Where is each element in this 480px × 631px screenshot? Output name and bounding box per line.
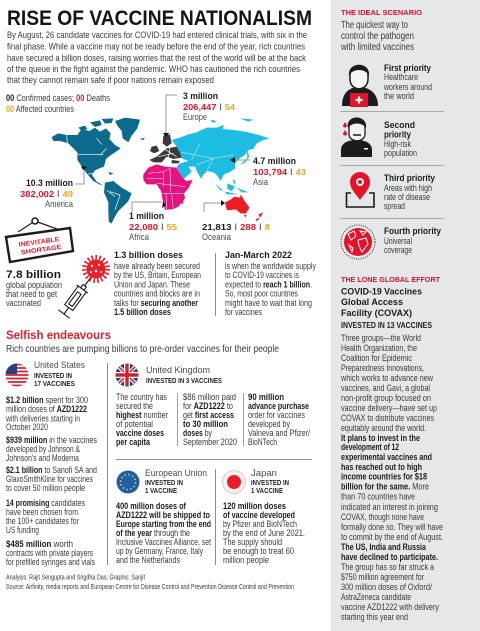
label: America: [20, 178, 73, 209]
text block: COVAX description: has reached out to high: [341, 462, 422, 472]
panel: the ideal scenario: The quickest way to: [341, 20, 408, 31]
panel: United States: [5, 360, 97, 567]
panel: European Union: up by Germany, France, Italy: [116, 546, 203, 556]
text: fourth priority: Universal: [384, 236, 412, 246]
text block: COVAX description: It plans to invest in the: [341, 433, 420, 443]
label: America: America: [45, 199, 73, 209]
credits: [6, 572, 294, 591]
icon: globe universal coverage: [341, 225, 375, 259]
text block: COVAX description: development of 12: [341, 442, 399, 452]
panel: United States: Johnson's and Moderna: [6, 453, 79, 463]
text block: COVAX description: [340, 333, 443, 622]
panel: United Kingdom: BioNTech: [248, 437, 277, 447]
icon: Japan flag: [222, 470, 246, 494]
panel: Japan: Japan: [251, 468, 277, 478]
panel: United States: October 2020: [6, 422, 48, 432]
panel: United Kingdom: September 2020: [183, 437, 237, 447]
panel: United Kingdom: for AZD1222 to: [183, 401, 233, 411]
panel: Japan: million people: [223, 555, 269, 565]
text block: Jan-March 2022: [225, 250, 316, 317]
text block: COVAX description: Coalition for Epidemic: [341, 353, 412, 363]
map region: Europe: [149, 134, 182, 163]
panel: European Union: European Union: [145, 468, 207, 478]
label: Europe: [183, 91, 235, 122]
text: fourth priority: [384, 226, 441, 255]
label: Asia: 103,794 I 43: [253, 167, 306, 177]
label: Europe: Europe: [183, 112, 207, 122]
panel: United Kingdom: of potential: [116, 419, 153, 429]
icon: UK flag: [115, 363, 139, 387]
panel: European Union: 400 million doses of: [116, 501, 187, 511]
text block: COVAX description: COVAX to distribute vaccines: [341, 413, 434, 423]
panel: European Union: Europe starting from the end: [116, 519, 211, 529]
text block: 1.3 billion doses: have already been secured: [114, 261, 200, 271]
icon: healthcare worker: [342, 65, 378, 107]
panel: Japan: [222, 468, 305, 565]
panel: United States: have been chosen from: [6, 507, 78, 517]
panel: United States: $485 million worth: [6, 539, 73, 549]
panel: European Union: and the Netherlands: [116, 555, 180, 565]
panel: Japan: The supply should: [223, 537, 282, 547]
text block: COVAX description: to commit by the end of August.: [341, 532, 443, 542]
text block: 7.8 billion: global population: [6, 280, 62, 290]
panel: United States: $2.1 billion to Sanofi SA and: [6, 465, 97, 475]
text block: COVAX description: experimental vaccines and: [341, 452, 432, 462]
panel: United States: to cover 50 million people: [6, 483, 85, 493]
label: Africa: Africa: [129, 232, 149, 242]
panel: Japan: 1 VACCINE: [251, 488, 283, 495]
panel: the lone global effort: THE LONE GLOBAL EFFORT: [341, 275, 441, 284]
text block: COVAX description: vaccines, and Gavi, a global: [341, 383, 430, 393]
world map: [52, 118, 269, 224]
text block: COVAX description: have declined to participate.: [341, 552, 438, 562]
label: Africa: 22,080 I 55: [129, 222, 177, 232]
panel: United Kingdom: $86 million paid: [183, 392, 236, 402]
text block: COVAX description: starting this year end: [341, 612, 408, 622]
panel: United Kingdom: secured the: [116, 401, 153, 411]
panel: Japan: by Pfizer and BioNTech: [223, 519, 297, 529]
icon: virus: [84, 258, 108, 280]
label: Asia: 4.7 million: [253, 156, 296, 166]
panel: United States: 14 promising candidates: [6, 498, 85, 508]
intro text block: have secured a billion doses, raising worries that the rest of the world will be at the back: [7, 53, 306, 64]
text: second priority: population: [384, 148, 417, 158]
text block: Jan-March 2022: for vaccines: [225, 307, 262, 317]
map region: America: [52, 118, 145, 224]
text: third priority: Areas with high: [384, 183, 432, 193]
callout lines and arrows on the map: [75, 95, 250, 212]
text: first priority: the world: [384, 91, 414, 101]
panel: United States: $1.2 billion spent for 300: [6, 395, 88, 405]
icon: hanging sign inevitable shortage: SHORTAGE: [20, 244, 63, 257]
panel: the lone global effort: COVID-19 Vaccines: [341, 286, 422, 296]
label: Europe: 206,447 I 54: [183, 102, 235, 112]
text block: 1.3 billion doses: countries and blocks are in: [114, 288, 200, 298]
panel: United Kingdom: advance purchase: [248, 401, 309, 411]
label: America: 382,002 I 49: [20, 189, 73, 199]
panel: United Kingdom: to 30 million: [183, 419, 228, 429]
label: Asia: Asia: [253, 177, 268, 187]
icon: US flag: [5, 363, 29, 387]
panel: United States: INVESTED IN: [34, 373, 72, 380]
text block: COVAX description: COVAX, though none have: [341, 512, 424, 522]
map legend: 00 Affected countries: [6, 104, 74, 114]
icon: hanging sign inevitable shortage: INEVITABLE: [18, 236, 61, 249]
panel: European Union: INVESTED IN: [145, 480, 183, 487]
panel: the ideal scenario: control the pathogen: [341, 31, 414, 42]
text block: COVAX description: indicated an interest in joining: [341, 502, 438, 512]
panel: United Kingdom: The country has: [116, 392, 167, 402]
text: third priority: [384, 173, 435, 211]
text: fourth priority: coverage: [384, 245, 412, 255]
icon: EU flag: [116, 470, 140, 494]
intro text block: final phase. While a vaccine may not be ready before the end of the year, rich countries: [7, 42, 305, 52]
map region: Oceania: [225, 194, 263, 222]
text: third priority: spread: [384, 201, 405, 211]
text block: COVAX description: Preparedness Innovations,: [341, 363, 424, 373]
panel: the lone global effort: [340, 275, 443, 622]
label: America: 10.3 million: [26, 178, 73, 188]
panel: United States: United States: [34, 360, 85, 370]
panel: United States: with deliveries starting in: [5, 414, 80, 424]
panel: United Kingdom: 90 million: [248, 392, 284, 402]
panel: United Kingdom: per capita: [116, 437, 151, 447]
panel: United States: the 100+ candidates for: [6, 516, 79, 526]
text: first priority: workers around: [383, 82, 432, 92]
credits: Analysis: Rajit Sengupta and Srigdha Das; Graphic: Sanjit: [6, 572, 146, 582]
text block: 7.8 billion: [6, 269, 62, 308]
text block: COVAX description: than 70 countries have: [341, 492, 415, 502]
text: first priority: [383, 63, 432, 101]
text block: COVAX description: vaccine AZD1222 with delivery: [341, 602, 439, 612]
panel: European Union: 1 VACCINE: [145, 488, 177, 495]
map region: Africa: [143, 164, 193, 210]
text: second priority: [384, 120, 417, 158]
panel: Japan: INVESTED IN: [251, 480, 289, 487]
panel: United States: for prefilled syringes and vials: [6, 557, 95, 567]
text block: COVAX description: The group has so far struck a: [341, 562, 434, 572]
map legend: 00 Confirmed cases; 00 Deaths: [6, 93, 110, 103]
panel: United States: contracts with private players: [6, 548, 93, 558]
icon: hanging sign inevitable shortage: [6, 218, 73, 262]
panel: United Kingdom: order for vaccines: [248, 410, 305, 420]
text block: 1.3 billion doses: Union and Japan. These: [114, 280, 190, 290]
text block: Jan-March 2022: So, most poor countries: [225, 288, 298, 298]
text block: COVAX description: 300 million doses of Oxford/: [341, 582, 432, 592]
text block: COVAX description: formally done so. They will have: [341, 522, 443, 532]
text: fourth priority: Fourth priority: [384, 226, 441, 236]
panel: United Kingdom: United Kingdom: [146, 365, 210, 375]
panel: United Kingdom: Valneva and Pfizer/: [248, 428, 310, 438]
panel: the lone global effort: Facility (COVAX): [341, 308, 412, 318]
text block: Jan-March 2022: might have to wait that long: [225, 298, 312, 308]
label: Oceania: Oceania: [202, 232, 231, 242]
text block: Jan-March 2022: Jan-March 2022: [225, 250, 292, 260]
icon: high-risk person: [341, 118, 372, 157]
text block: 1.3 billion doses: 1.5 billion doses: [114, 307, 171, 317]
text block: COVAX description: AstraZeneca candidate: [341, 592, 411, 602]
text block: COVAX description: income countries for $18: [341, 472, 427, 482]
text: second priority: High-risk: [384, 139, 411, 149]
title: RISE OF VACCINE NATIONALISM: [7, 7, 312, 30]
panel: United Kingdom: doses by: [183, 428, 212, 438]
panel: Japan: of vaccine developed: [223, 510, 295, 520]
panel: Japan: 120 million doses: [223, 501, 286, 511]
subheading: Rich countries are pumping billions to pre-order vaccines for their people: [6, 343, 279, 355]
panel: United States: developed by Johnson &: [6, 444, 80, 454]
panel: European Union: of the year through the: [116, 528, 190, 538]
text block: COVAX description: vaccine delivery—have set up: [341, 403, 437, 413]
label: Europe: 3 million: [183, 91, 218, 101]
panel: the lone global effort: INVESTED IN 13 VACCINES: [341, 321, 433, 330]
icon: map pin over area: [346, 172, 374, 207]
text block: 7.8 billion: vaccinated: [6, 298, 41, 308]
text: second priority: Second: [384, 120, 415, 130]
intro text block: [7, 30, 307, 86]
intro text block: By August, 26 candidate vaccines for COVID-19 had entered clinical trials, with six in the: [7, 30, 307, 41]
panel: the ideal scenario: with limited vaccines: [340, 42, 414, 53]
intro text block: of the queue in the fight against the pandemic. WHO has cautioned the rich countries: [7, 64, 300, 75]
heading: selfish endeavours: Selfish endeavours: [6, 330, 111, 342]
map legend: [6, 93, 110, 114]
text block: Jan-March 2022: is when the worldwide supply: [225, 261, 316, 271]
text block: 1.3 billion doses: [114, 250, 201, 317]
panel: United States: GlaxoSmithKline for vaccines: [6, 474, 93, 484]
text block: COVAX description: Three groups—the World: [341, 333, 421, 343]
label: Africa: 1 million: [129, 211, 164, 221]
text block: COVAX description: $750 million agreement for: [341, 572, 424, 582]
text block: 7.8 billion: 7.8 billion: [6, 269, 61, 281]
panel: United States: million doses of AZD1222: [6, 404, 87, 414]
credits: Source: Airfinity, media reports and European Centre for Disease Control and Prevention Disease Control and Prevention: [6, 582, 294, 591]
text block: 1.3 billion doses: talks for securing another: [114, 298, 198, 308]
text block: 7.8 billion: that need to get: [6, 289, 57, 299]
panel: Japan: by the end of June 2021.: [223, 528, 305, 538]
panel: United States: 17 VACCINES: [34, 381, 75, 388]
label: Asia: [253, 156, 306, 187]
text block: COVAX description: Health Organization, the: [341, 343, 417, 353]
text block: COVAX description: equitably around the world.: [341, 423, 426, 433]
panel: the ideal scenario: THE IDEAL SCENARIO: [341, 8, 422, 17]
label: Africa: [129, 211, 177, 242]
panel: United Kingdom: vaccine doses: [116, 428, 164, 438]
text block: Jan-March 2022: to COVID-19 vaccines is: [225, 270, 299, 280]
panel: European Union: AZD1222 will be shipped to: [116, 510, 210, 520]
text block: 1.3 billion doses: by the US, Britain, European: [114, 270, 201, 280]
panel: United Kingdom: get first access: [183, 410, 234, 420]
panel: United States: $939 million in the vaccines: [6, 435, 97, 445]
map region: Asia: [172, 118, 269, 194]
text: third priority: rate of disease: [384, 192, 430, 202]
panel: the lone global effort: Global Access: [341, 297, 403, 307]
text block: COVAX description: billion for the same. More: [341, 482, 429, 492]
panel: United Kingdom: highest number: [116, 410, 168, 420]
label: Oceania: [202, 222, 270, 242]
panel: European Union: [116, 468, 211, 565]
panel: United Kingdom: INVESTED IN 3 VACCINES: [146, 378, 222, 385]
panel: United Kingdom: [115, 363, 310, 447]
text: first priority: First priority: [384, 63, 431, 73]
label: Oceania: 21,813 I 288 I 8: [202, 222, 270, 232]
text block: COVAX description: which works to advance new: [340, 373, 433, 383]
panel: United States: US funding: [6, 525, 39, 535]
panel: European Union: Inclusive Vaccines Alliance, set: [116, 537, 211, 547]
icon: syringe: [58, 273, 97, 318]
panel: Japan: be enough to treat 60: [223, 546, 294, 556]
intro text block: that they cannot remain safe if poor nations remain exposed: [7, 75, 214, 86]
text block: COVAX description: The US, India and Russia: [341, 542, 427, 552]
text block: Jan-March 2022: expected to reach 1 billion.: [225, 280, 312, 290]
text: second priority: priority: [384, 130, 411, 140]
panel: United Kingdom: developed by: [248, 419, 290, 429]
text block: 1.3 billion doses: 1.3 billion doses: [114, 250, 183, 260]
text: first priority: Healthcare: [384, 72, 418, 82]
panel: the ideal scenario: [340, 8, 444, 259]
text: third priority: Third priority: [384, 173, 435, 183]
panel: right sidebar background: [331, 0, 480, 631]
text block: COVAX description: non-profit group focused on: [341, 393, 431, 403]
